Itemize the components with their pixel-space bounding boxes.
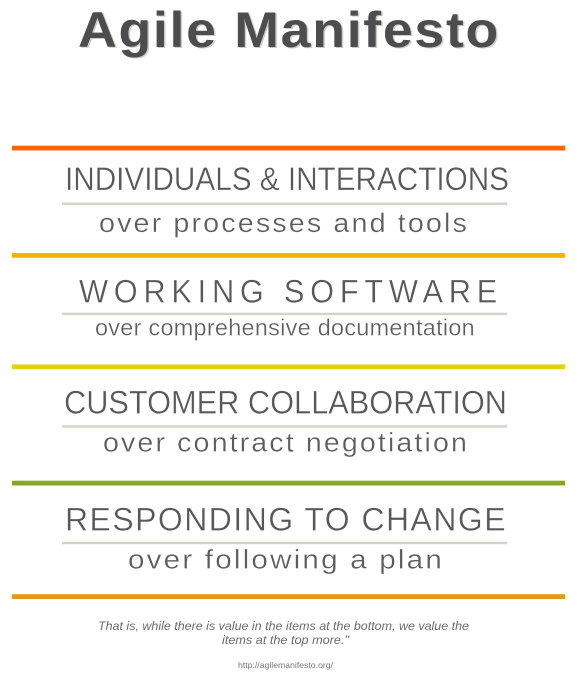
value 1: individuals and interactions: over processes and tools [99,208,469,238]
value 4: responding to change: over following a plan [128,544,444,574]
value 3: customer collaboration: over contract negotiation [103,427,469,457]
footer quote: That is, while there is value in the items at the bottom, we value the [98,619,469,633]
footer quote [98,619,469,647]
value 3: customer collaboration [62,384,507,457]
value 1: individuals and interactions [62,161,509,238]
bar: yellow [12,364,565,369]
value 2: working software: over comprehensive documentation [95,314,475,340]
value 4: responding to change: RESPONDING TO CHANGE [65,502,507,538]
bar: orange [12,146,565,150]
bar: amber [12,253,565,258]
source url: http://agilemanifesto.org/ [238,660,334,670]
title: Agile Manifesto [78,2,500,58]
value 2: working software [62,274,507,340]
value 1: individuals and interactions: INDIVIDUALS & INTERACTIONS [65,161,509,197]
value 2: working software: WORKING SOFTWARE [79,274,503,310]
bar: olive green [12,481,565,486]
footer quote: items at the top more." [222,633,350,647]
value 4: responding to change [62,502,507,574]
bar: dark amber [12,594,565,599]
value 3: customer collaboration: CUSTOMER COLLABORATION [64,384,507,420]
title: Agile Manifesto [80,3,501,59]
